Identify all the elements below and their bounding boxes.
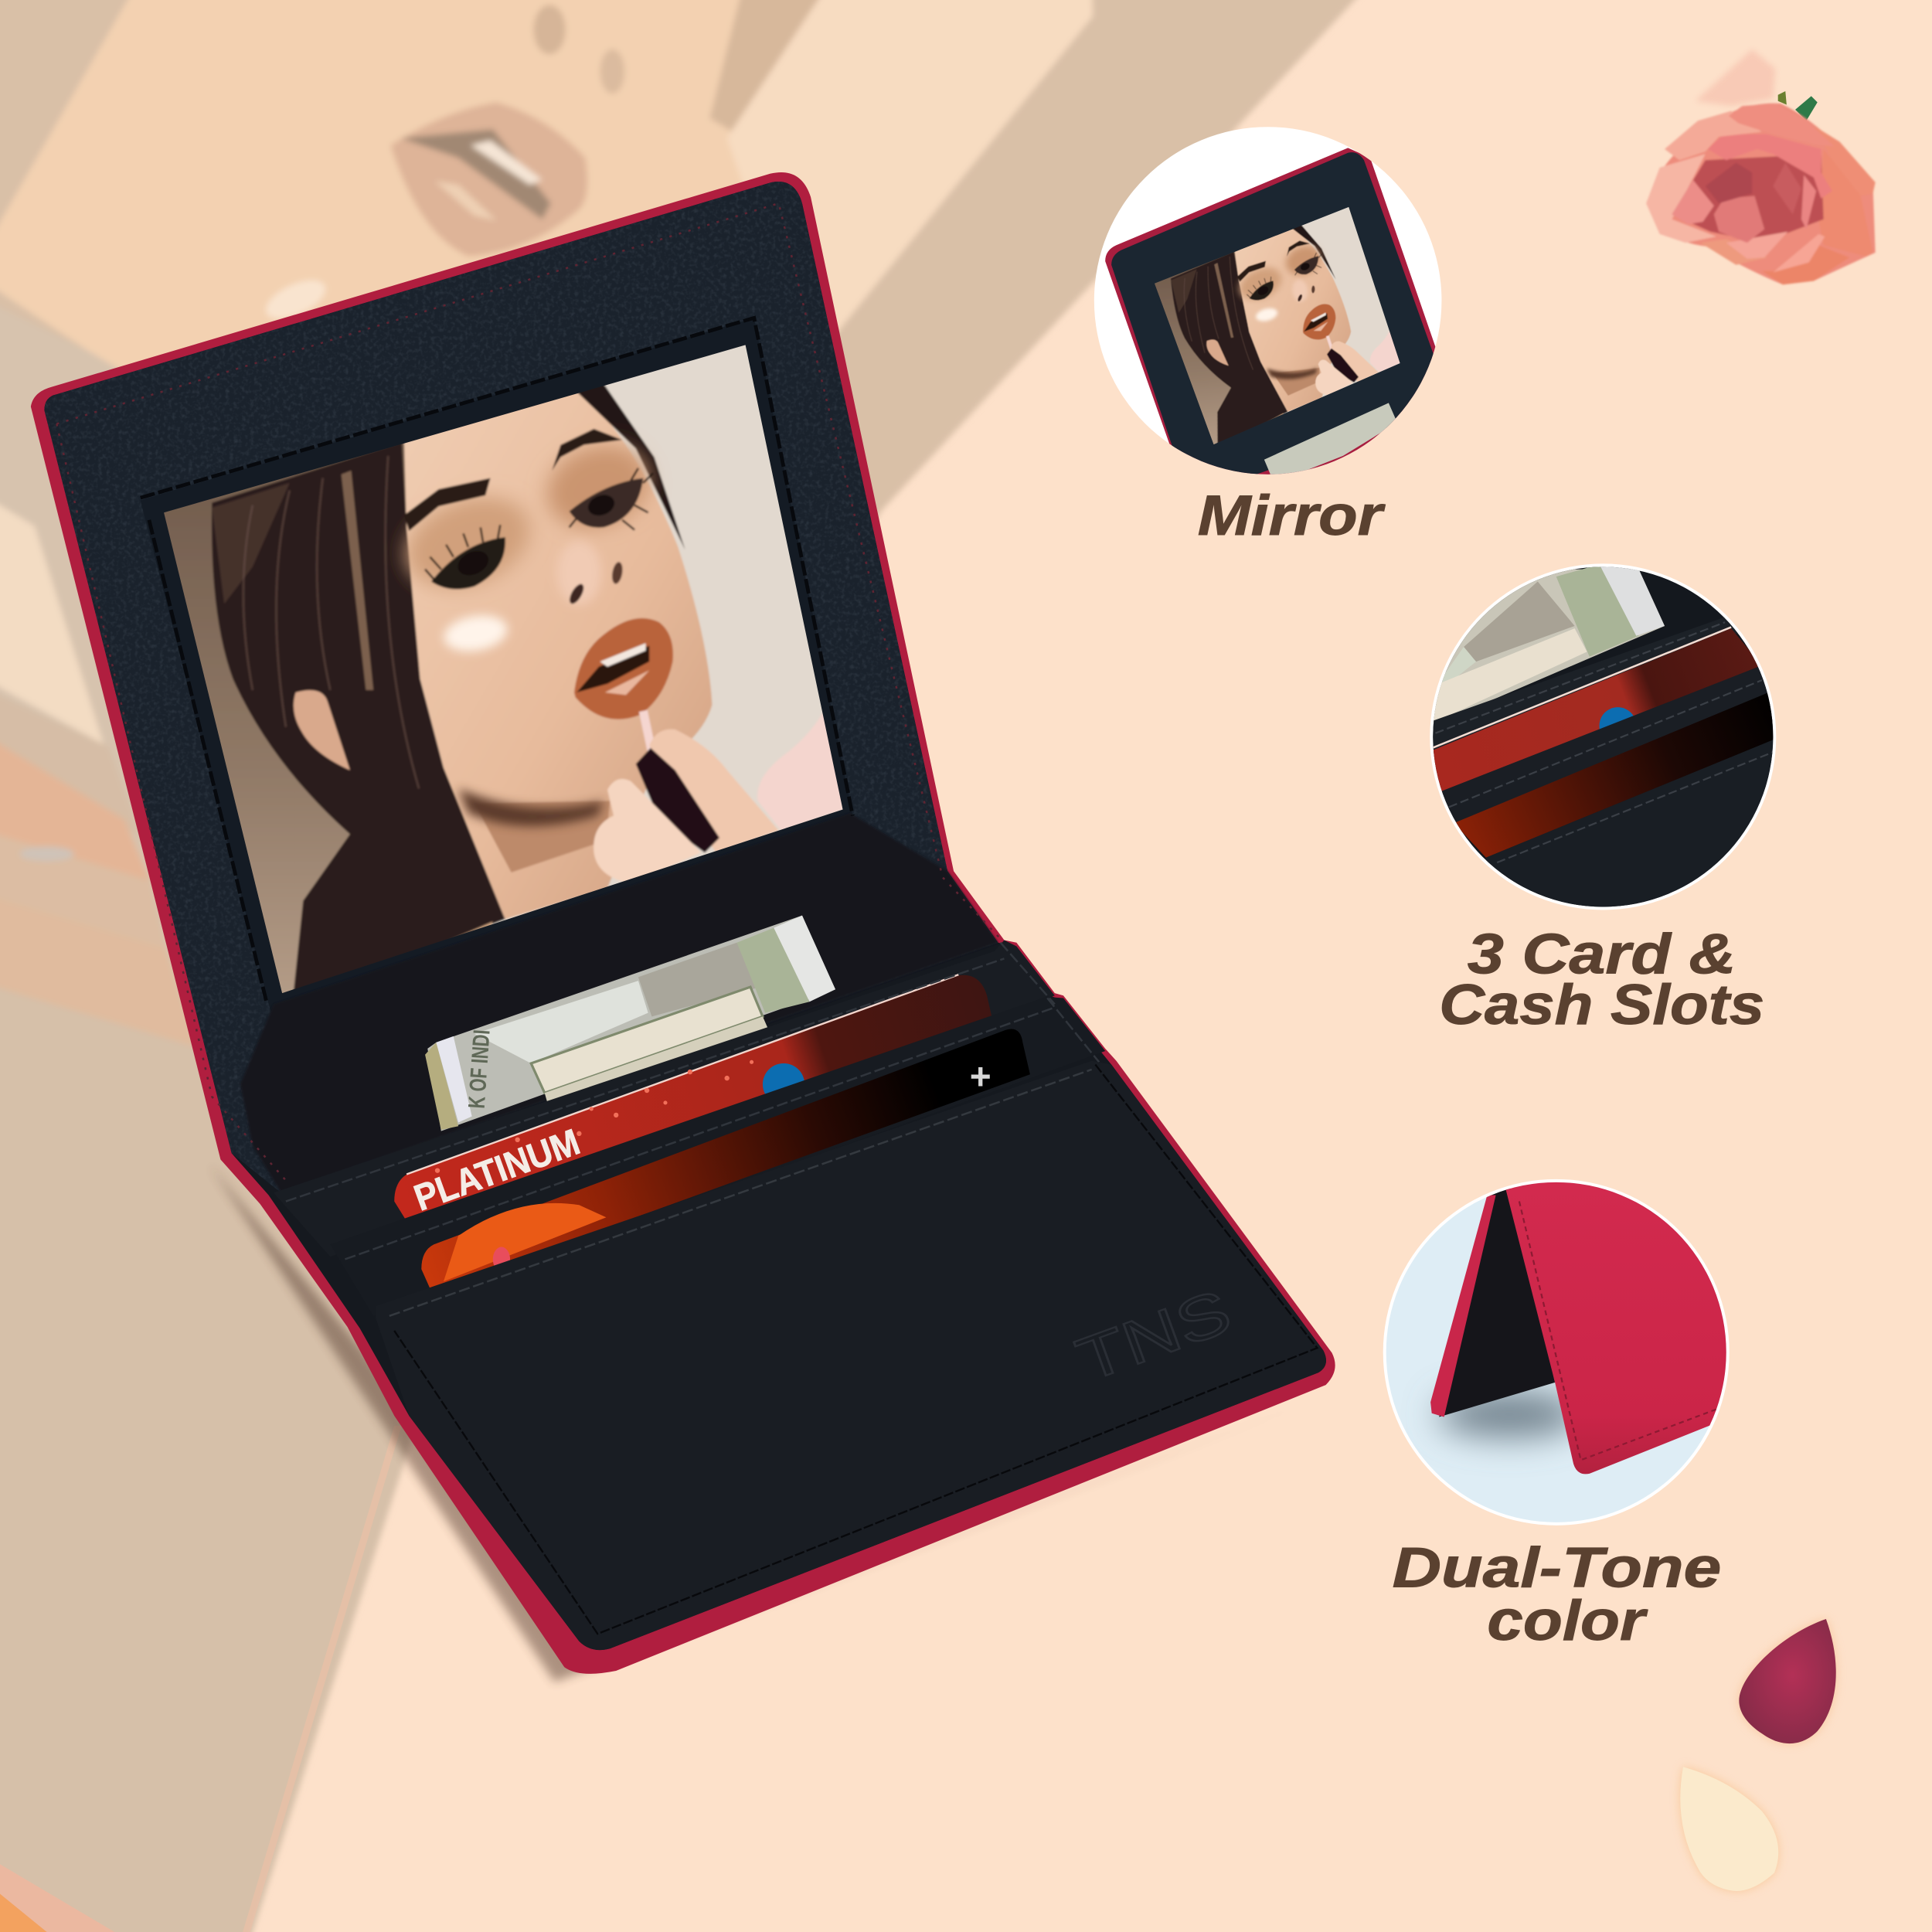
caption: Dual-Tone color: Dual-Tone — [1393, 1536, 1721, 1600]
caption: Mirror: Mirror — [1198, 484, 1386, 547]
upper panel with frame — [44, 182, 1001, 1192]
feature circle: dual-tone colour — [1380, 1177, 1737, 1534]
main wallet — [31, 172, 1335, 1682]
caption: 3 Card & Cash Slots: 3 Card & — [1468, 923, 1736, 986]
top strip — [1429, 615, 1750, 754]
first pocket strip — [274, 940, 1055, 1257]
orange card — [421, 1029, 1030, 1291]
second pocket strip — [330, 997, 1105, 1316]
banknote — [425, 916, 835, 1131]
mini banknote — [1264, 403, 1396, 474]
card plus mark: + — [970, 1056, 992, 1097]
caption: Dual-Tone color — [1393, 1536, 1721, 1652]
front pocket — [376, 1061, 1326, 1650]
feature circle: mirror — [1094, 127, 1441, 487]
caption: Dual-Tone color: color — [1487, 1589, 1648, 1652]
mirror with reflected face — [148, 332, 862, 1010]
stitching: pockets — [286, 943, 1099, 1259]
wallet crimson outer edge — [31, 172, 1335, 1674]
card wordmark: PLATINUM — [409, 1121, 585, 1219]
card: Platinum — [394, 975, 993, 1227]
window recess — [141, 318, 852, 1013]
icon: cream sponge — [1680, 1767, 1778, 1891]
zoomed front pocket — [1485, 740, 1773, 907]
feature circle: card and cash slots — [1430, 563, 1776, 910]
icon: makeup sponge — [1739, 1619, 1836, 1743]
middle strip — [1435, 665, 1781, 823]
note lettering: K OF INDI — [464, 1029, 495, 1109]
mini wallet — [1105, 148, 1441, 487]
zoomed red card — [1429, 628, 1762, 794]
caption: 3 Card & Cash Slots: Cash Slots — [1439, 973, 1764, 1036]
zoomed banknote — [1429, 570, 1665, 727]
wallet shadow — [209, 1165, 1331, 1682]
zoomed dark card — [1454, 688, 1781, 858]
icon: rose — [1646, 49, 1876, 284]
backdrop wallet edge — [0, 1426, 402, 1932]
caption: 3 Card & Cash Slots — [1439, 923, 1764, 1036]
wallet black lining — [44, 182, 1326, 1650]
faded enlarged wallet backdrop — [0, 0, 1378, 1932]
shadow on floor — [1438, 1393, 1581, 1437]
wallet inner black — [1439, 1183, 1555, 1417]
crimson cover — [1505, 1177, 1737, 1474]
fold below the mirror — [240, 813, 998, 1192]
embossed logo: TNS — [1068, 1276, 1240, 1395]
